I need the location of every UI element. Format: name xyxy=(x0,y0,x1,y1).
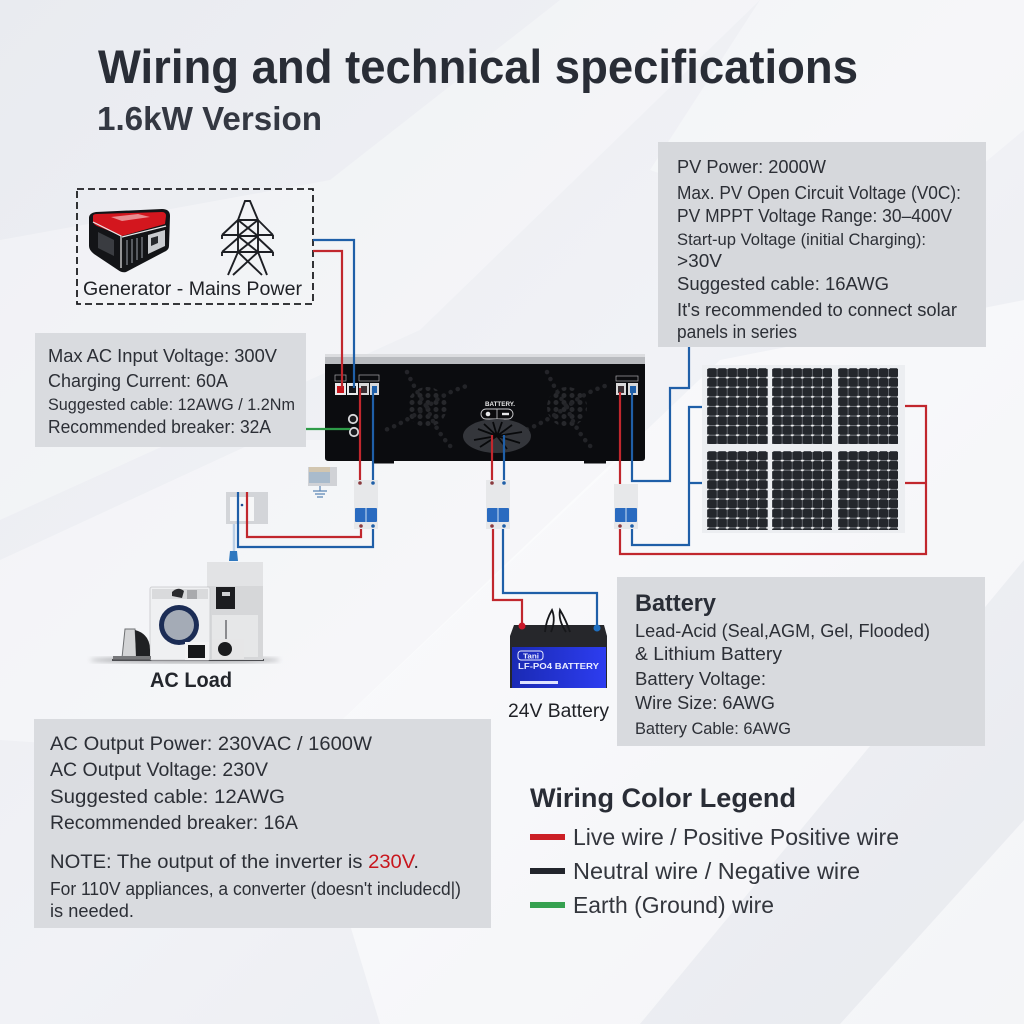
earth terminals xyxy=(349,415,358,436)
subtitle: 1.6kW Version xyxy=(97,100,322,137)
icon: 24V battery: Tani xyxy=(523,654,539,660)
panel: AC input specifications: Max AC Input Voltage: 300V xyxy=(48,346,277,366)
icon: 24V battery: LF-PO4 BATTERY xyxy=(518,662,600,671)
icon: plug xyxy=(229,551,238,561)
appliance: small box xyxy=(185,642,209,660)
icon: earth terminal box xyxy=(308,467,337,497)
panel: AC output specifications: AC Output Power: 230VAC / 1600W xyxy=(50,733,373,755)
panel: PV specifications: PV Power: 2000W xyxy=(677,157,826,177)
panel: AC input specifications: Charging Current: 60A xyxy=(48,371,228,391)
AC input and output terminals xyxy=(335,375,379,395)
wiring color legend xyxy=(530,783,899,918)
panel: AC output specifications: For 110V appliances, a converter (doesn't includecd|) xyxy=(50,879,461,899)
panel: PV specifications: panels in series xyxy=(677,322,797,342)
panel: PV specifications xyxy=(658,142,986,347)
panel: battery specifications: Battery Cable: 6AWG xyxy=(635,719,791,738)
appliance: mixer xyxy=(212,620,244,659)
legend item: live: Live wire / Positive Positive wire xyxy=(573,824,899,850)
panel: generator and mains power source xyxy=(77,189,313,304)
solar panel top middle xyxy=(772,368,832,444)
battery polarity buttons xyxy=(481,409,513,419)
panel: AC output specifications: Recommended breaker: 16A xyxy=(50,812,298,834)
wiring: AC input from generator and mains xyxy=(313,240,354,388)
legend item: earth: Earth (Ground) wire xyxy=(573,892,774,918)
inverter xyxy=(325,354,645,464)
panel: PV specifications: >30V xyxy=(677,251,722,271)
solar array xyxy=(702,365,905,533)
panel: AC output specifications: Suggested cable: 12AWG xyxy=(50,786,285,808)
panel: AC input specifications xyxy=(35,333,306,447)
solar panel bottom middle xyxy=(772,451,832,530)
icon: transmission tower xyxy=(222,201,273,275)
fan left xyxy=(385,372,470,448)
solar panel bottom right xyxy=(838,451,898,530)
panel: PV specifications: Start-up Voltage (initial Charging): xyxy=(677,230,926,249)
breaker: solar xyxy=(614,484,638,529)
AC load appliances xyxy=(90,551,280,663)
panel: AC output specifications: NOTE: The output of the inverter is 230V. xyxy=(50,851,419,873)
legend heading: Wiring Color Legend xyxy=(530,783,796,813)
icon: 24V battery xyxy=(510,610,607,688)
wiring: AC output through breaker to load xyxy=(238,388,373,547)
solar panel top left xyxy=(707,368,768,444)
panel: battery specifications: Battery xyxy=(635,590,717,617)
battery cable gland xyxy=(463,419,531,453)
panel: AC output specifications xyxy=(34,719,491,928)
battery port label: BATTERY. xyxy=(485,401,515,408)
panel: battery specifications: & Lithium Battery xyxy=(635,644,782,664)
wiring: solar xyxy=(620,347,926,554)
panel: AC output specifications: AC Output Voltage: 230V xyxy=(50,759,268,781)
solar panel top right xyxy=(838,368,898,444)
panel: AC output specifications: is needed. xyxy=(50,901,134,921)
title: Wiring and technical specifications xyxy=(98,40,858,93)
fan right xyxy=(525,372,608,448)
icon: wall socket xyxy=(226,492,268,552)
panel: battery specifications: Battery Voltage: xyxy=(635,669,766,689)
appliance: tall cabinet xyxy=(207,562,263,660)
breaker: battery xyxy=(486,480,510,529)
label: generator and mains power: Generator - Mains Power xyxy=(83,279,303,300)
breaker: AC output xyxy=(354,480,378,529)
panel: PV specifications: It's recommended to connect solar xyxy=(677,300,957,320)
PV terminals xyxy=(616,376,638,395)
appliance: kettle xyxy=(113,629,151,660)
wiring: battery xyxy=(492,435,597,626)
panel: PV specifications: Suggested cable: 16AWG xyxy=(677,274,889,294)
panel: AC input specifications: Suggested cable: 12AWG / 1.2Nm xyxy=(48,395,295,414)
solar panel bottom left xyxy=(707,451,768,530)
panel: PV specifications: PV MPPT Voltage Range: 30–400V xyxy=(677,206,952,226)
label: AC load: AC Load xyxy=(150,669,232,692)
panel: AC input specifications: Recommended breaker: 32A xyxy=(48,417,271,437)
panel: battery specifications: Lead-Acid (Seal,AGM, Gel, Flooded) xyxy=(635,621,930,641)
panel: battery specifications xyxy=(617,577,985,746)
legend item: neutral: Neutral wire / Negative wire xyxy=(573,858,860,884)
label: 24V battery: 24V Battery xyxy=(508,701,610,722)
panel: battery specifications: Wire Size: 6AWG xyxy=(635,693,775,713)
panel: PV specifications: Max. PV Open Circuit Voltage (V0C): xyxy=(677,183,961,203)
icon: generator xyxy=(89,209,170,272)
wiring: earth xyxy=(306,428,350,430)
appliance: washing machine xyxy=(150,587,210,660)
